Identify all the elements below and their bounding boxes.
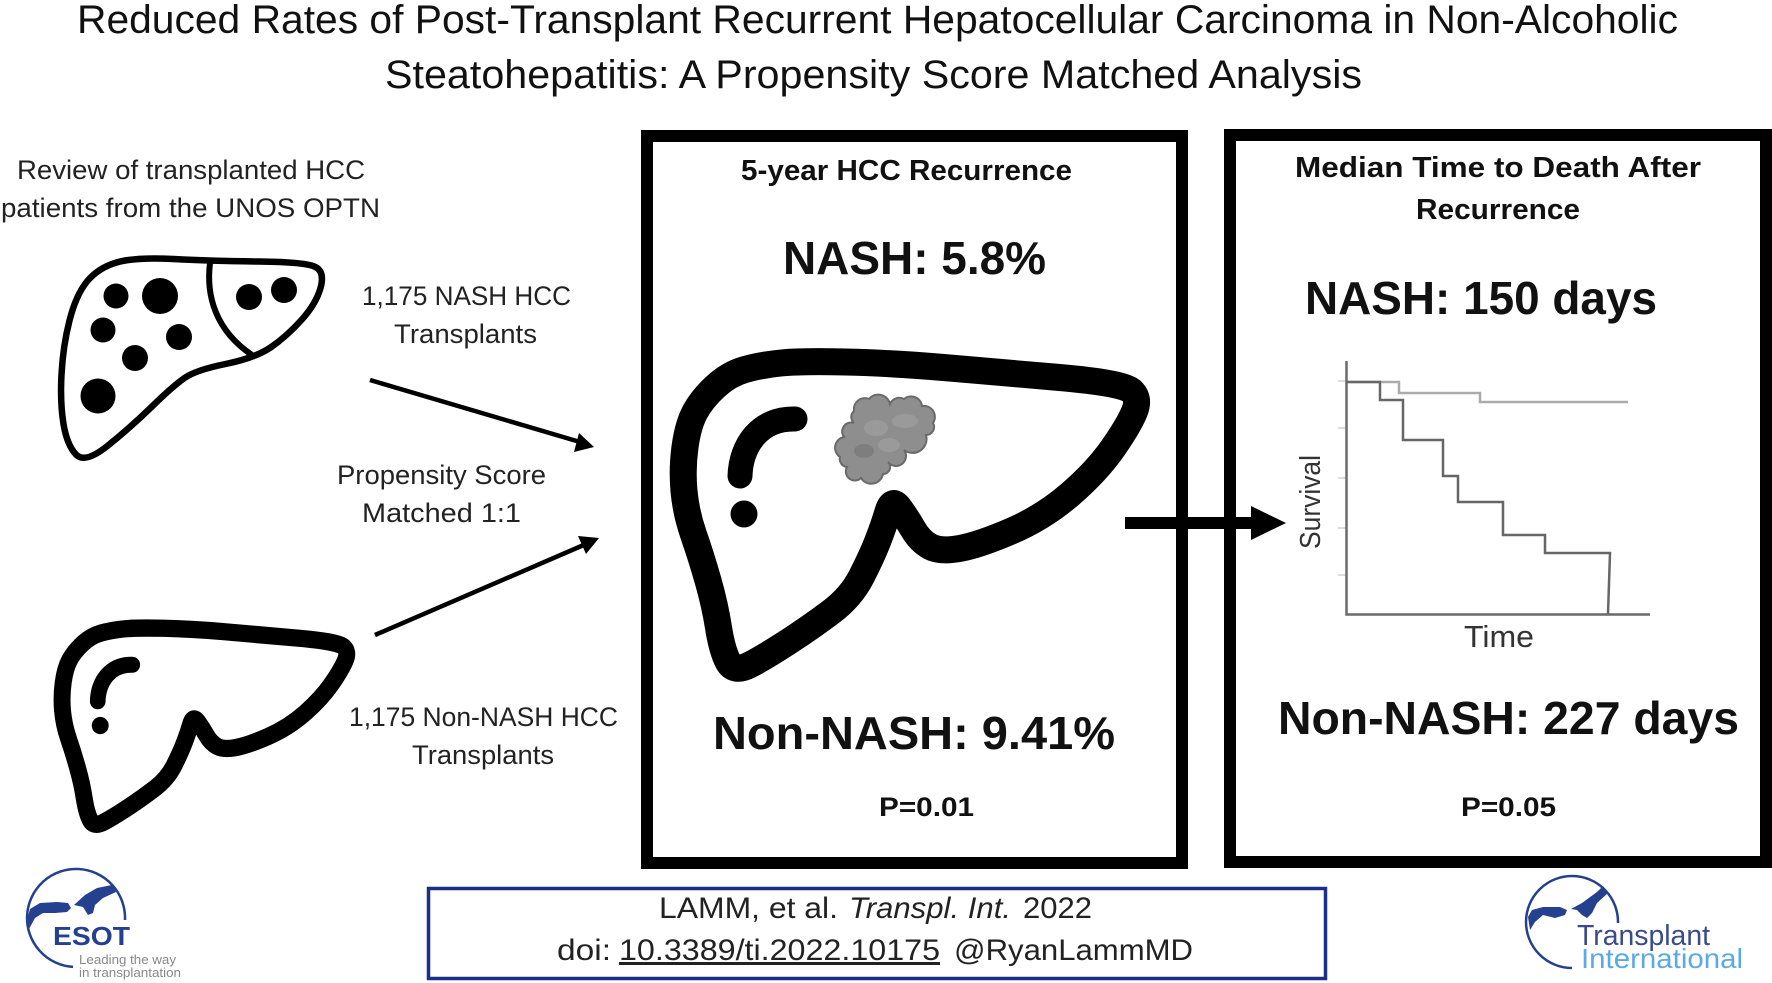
panel: 5-year HCC recurrence <box>647 136 1182 863</box>
chart: survival curves: Survival <box>1295 455 1327 549</box>
heading: median time to death: Median Time to Death After <box>1295 152 1701 184</box>
citation box: doi: <box>557 934 611 967</box>
logo: Transplant International: International <box>1581 943 1743 974</box>
label: propensity score matching: Matched 1:1 <box>362 498 521 528</box>
icon: NASH liver with fatty spots <box>61 258 322 458</box>
title <box>77 0 1678 97</box>
logo: ESOT: ESOT <box>53 921 130 951</box>
citation box: @RyanLammMD <box>954 934 1193 967</box>
arrow: non-NASH to matching <box>375 536 599 635</box>
chart: survival curves: Time <box>1464 619 1534 654</box>
statistic: NASH recurrence: NASH: 5.8% <box>783 232 1046 284</box>
label: non-NASH transplants: 1,175 Non-NASH HCC <box>349 702 618 732</box>
statistic: NASH time to death: NASH: 150 days <box>1305 272 1657 324</box>
statistic: non-NASH time to death: Non-NASH: 227 days <box>1278 692 1739 744</box>
label: non-NASH transplants <box>349 702 618 770</box>
icon: liver with tumour <box>683 362 1137 668</box>
text block: study review: patients from the UNOS OPTN <box>1 193 380 223</box>
logo: ESOT <box>27 869 181 980</box>
label: NASH transplants: 1,175 NASH HCC <box>362 281 571 311</box>
logo: ESOT: in transplantation <box>79 965 181 980</box>
label: propensity score matching <box>337 460 546 528</box>
label: non-NASH transplants: Transplants <box>412 740 554 770</box>
citation box <box>428 888 1326 978</box>
title: Steatohepatitis: A Propensity Score Matched Analysis <box>385 53 1362 97</box>
chart: survival curves <box>1295 361 1650 654</box>
logo: ESOT: Leading the way <box>79 952 177 967</box>
logo: Transplant International: Transplant <box>1577 920 1710 952</box>
label: propensity score matching: Propensity Score <box>337 460 546 490</box>
heading: median time to death: Recurrence <box>1416 194 1580 226</box>
text block: study review <box>1 155 380 223</box>
text block: study review: Review of transplanted HCC <box>17 155 365 185</box>
panel: median time to death <box>1230 135 1766 862</box>
logo: Transplant International <box>1526 876 1743 974</box>
citation box: 2022 <box>1023 892 1092 925</box>
citation box: Transpl. Int. <box>849 892 1011 925</box>
statistic: non-NASH recurrence: Non-NASH: 9.41% <box>713 707 1115 759</box>
arrow: recurrence to survival <box>1125 506 1286 540</box>
p-value: recurrence: P=0.01 <box>879 792 974 822</box>
citation box: LAMM, et al. <box>659 892 838 925</box>
citation box: 10.3389/ti.2022.10175 <box>619 934 940 967</box>
label: NASH transplants: Transplants <box>394 319 537 349</box>
icon: non-NASH liver <box>62 628 347 824</box>
label: NASH transplants <box>362 281 571 349</box>
heading: recurrence: 5-year HCC Recurrence <box>741 155 1072 187</box>
arrow: NASH to matching <box>370 380 594 452</box>
heading: median time to death <box>1295 152 1701 226</box>
icon: tumour <box>835 395 935 484</box>
p-value: time to death: P=0.05 <box>1461 792 1556 822</box>
